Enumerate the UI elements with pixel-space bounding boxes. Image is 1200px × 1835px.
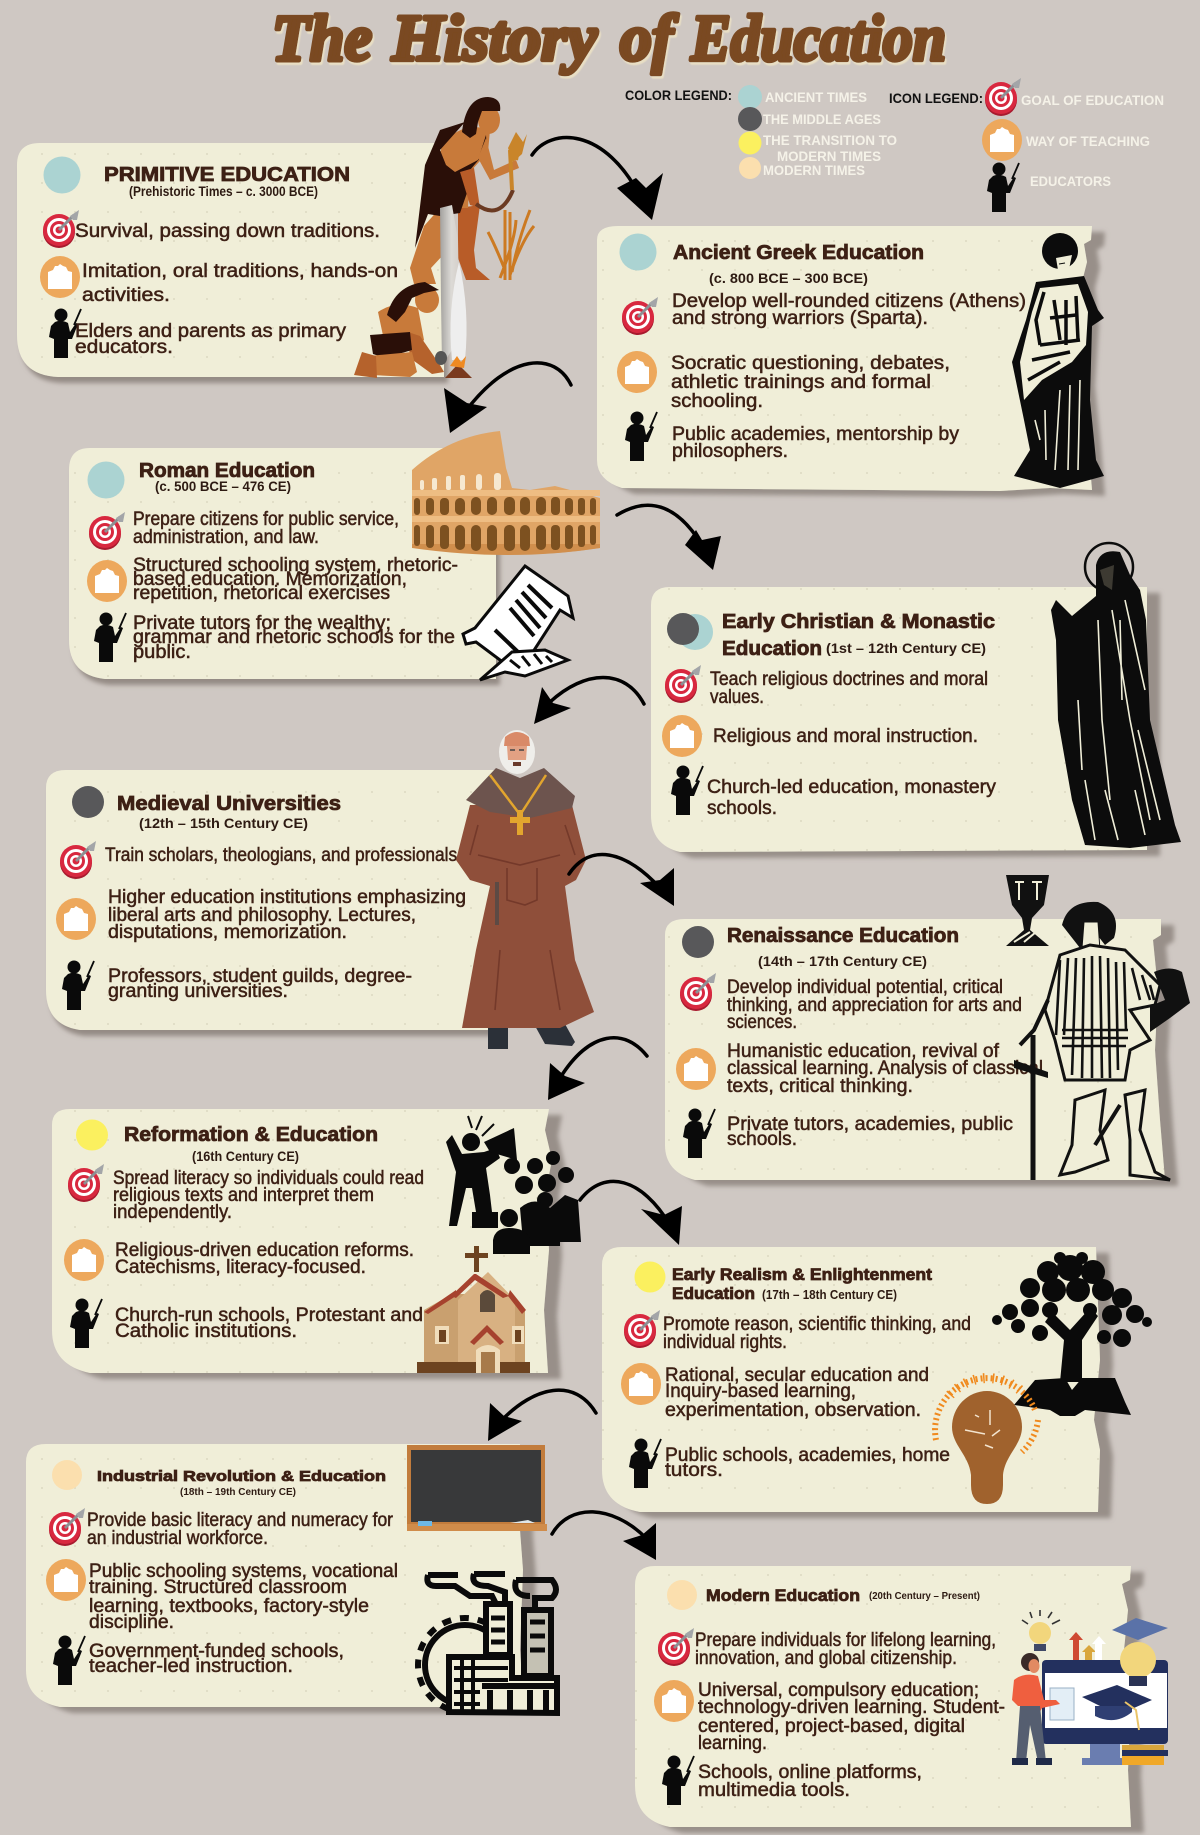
middle ages label: THE MIDDLE AGES [763,111,881,127]
illustration: factory [418,1574,557,1713]
goal text: thinking, and appreciation for arts and [727,995,1022,1016]
panel background [69,448,496,679]
illustration: church [417,1246,530,1373]
goal text [710,669,988,708]
heading: Reformation & Education [124,1124,378,1146]
goal text: Provide basic literacy and numeracy for [87,1510,394,1531]
teaching text [115,1240,414,1278]
teaching text: Universal, compulsory education; [698,1680,979,1701]
teaching text: texts, critical thinking. [727,1076,913,1097]
teaching text: based education. Memorization, [133,569,407,590]
educators text: philosophers. [672,441,788,462]
goal text: administration, and law. [133,527,319,548]
title: Education [690,2,946,75]
period: (14th – 17th Century CE) [758,954,927,969]
teaching text [671,353,950,412]
goal text [87,1510,394,1549]
period: (c. 800 BCE – 300 BCE) [709,271,868,286]
arrow: christian to medieval [534,678,644,724]
panel: renaissance education [665,875,1190,1180]
idea bulb [1022,1610,1060,1651]
icon: educator [70,1298,102,1348]
icon: educator [94,612,126,662]
panel background [602,1247,1100,1512]
orator [446,1116,517,1228]
educators label: EDUCATORS [1030,173,1111,189]
illustration: light bulb [935,1378,1038,1504]
teaching text: athletic trainings and formal [671,372,931,393]
icon: goal [49,1508,85,1546]
teaching text [133,555,458,604]
icon: educator [625,412,657,461]
heading: Early Christian & Monastic [722,611,995,633]
panel background [52,1109,552,1373]
goal text [672,291,1026,329]
era dot [667,1580,697,1610]
illustration: goblet [1006,875,1049,946]
icon legend [889,78,1164,212]
icon: teaching [617,351,657,393]
illustration: tree on open book [992,1252,1152,1416]
panel background [17,143,444,377]
icon: educator [53,1636,85,1685]
educators text: Church-run schools, Protestant and [115,1305,423,1326]
arrow: roman to christian [617,505,721,570]
illustration: cave people and fire [354,97,534,378]
period: (12th – 15th Century CE) [139,816,308,831]
campfire [435,351,472,378]
goal text: Develop individual potential, critical [727,977,1003,998]
teaching label: WAY OF TEACHING [1026,133,1150,149]
teaching text: Rational, secular education and [665,1365,929,1386]
goal text [133,509,399,548]
icon: goal [43,210,79,248]
era dot [72,786,104,818]
heading: PRIMITIVE EDUCATION [104,164,350,186]
icon: educator [671,766,703,815]
shoes [488,1024,575,1049]
teaching text: learning, textbooks, factory-style [89,1596,369,1617]
gold cross [490,775,546,835]
arrow: renaissance to reformation [548,1038,647,1100]
icon: teaching [40,256,80,298]
period: (18th – 19th Century CE) [180,1486,296,1498]
teaching text [698,1680,1005,1754]
icon: goal [89,512,125,550]
smoke column [440,205,459,365]
era dot [634,1262,666,1292]
era dot [667,613,713,650]
goal text: sciences. [727,1012,797,1033]
ancient times label: ANCIENT TIMES [765,89,867,105]
sleeves [470,825,575,1010]
title: History [391,2,598,75]
illustration: orator and crowd [446,1116,581,1254]
teaching text: classical learning. Analysis of classical [727,1058,1043,1079]
arrow: industrial to modern [552,1512,656,1560]
hood [466,768,575,818]
educators text: Church-led education, monastery [707,777,997,798]
teaching text [89,1561,398,1633]
illustration: greek woman statue [1012,233,1104,488]
heading [722,611,995,660]
goal text: religious texts and interpret them [113,1185,374,1206]
kneeling figure [354,282,444,378]
educators text: schools. [707,798,777,819]
large bulb and cap [1112,1618,1168,1686]
teaching text: Humanistic education, revival of [727,1041,1000,1062]
educators text: Schools, online platforms, [698,1762,922,1783]
monitor [1042,1660,1168,1744]
heading: Roman Education [139,460,315,482]
panel: early christian and monastic education [651,543,1181,852]
teaching text: disputations, memorization. [108,922,347,943]
arrow: reformation to realism [580,1181,682,1245]
teaching text: Socratic questioning, debates, [671,353,950,374]
books [1122,1745,1168,1765]
goal text: and strong warriors (Sparta). [672,308,928,329]
teaching text [727,1041,1043,1097]
goal text [113,1168,424,1223]
panel: medieval universities [46,770,500,1030]
icon: goal [665,665,701,703]
illustration: modern learning scene [1012,1610,1168,1765]
educators text: Private tutors, academies, public [727,1114,1013,1135]
period: (1st – 12th Century CE) [826,641,986,656]
educators text: Government-funded schools, [89,1641,344,1662]
educators text [75,321,347,358]
goal text: values. [710,687,764,708]
modern label: MODERN TIMES [763,162,865,178]
goal text: Prepare individuals for lifelong learning, [695,1630,996,1651]
crowd [493,1151,581,1254]
icon: educator [987,162,1019,212]
teaching text: Structured schooling system, rhetoric- [133,555,458,576]
heading: Renaissance Education [727,925,959,947]
educators text: granting universities. [108,981,288,1002]
teaching text: technology-driven learning. Student- [698,1697,1005,1718]
era dot [682,926,714,958]
panel background [597,226,1092,491]
teaching text: Catechisms, literacy-focused. [115,1257,366,1278]
period: (20th Century – Present) [869,1590,980,1602]
era dot [44,156,80,194]
educators text: public. [133,642,191,663]
panel: modern education [635,1566,1168,1827]
educators text: schools. [727,1129,797,1150]
ancient times swatch [738,85,762,109]
goal text: Teach religious doctrines and moral [710,669,988,690]
icon: teaching [982,119,1022,161]
icon: goal [680,973,716,1011]
icon: teaching [56,898,96,940]
transition label: THE TRANSITION TO [763,132,897,148]
panel: primitive education [17,143,444,377]
icon: educator [662,1756,694,1805]
goal text: Develop well-rounded citizens (Athens) [672,291,1026,312]
illustration: colosseum [412,431,600,555]
goal text [695,1630,996,1669]
panel background [635,1566,1131,1827]
educators text: Public schools, academies, home [665,1445,950,1466]
panel background [665,919,1165,1180]
era dot [52,1460,82,1490]
middle ages swatch [738,107,762,131]
period: (Prehistoric Times – c. 3000 BCE) [129,184,318,199]
icon: teaching [46,1559,86,1601]
transition label: MODERN TIMES [777,148,881,164]
icon: educator [49,308,81,358]
transition swatch [738,132,762,154]
illustration: monk [456,730,594,1049]
panel background [651,587,1147,852]
arrow: medieval to renaissance [569,855,674,906]
era dot [76,1120,108,1150]
educators text: grammar and rhetoric schools for the [133,627,455,648]
teaching text: discipline. [89,1612,174,1633]
dry plant [488,210,534,280]
educators text [89,1641,344,1677]
teaching text [665,1365,929,1421]
rope [495,882,499,925]
heading: Early Realism & Enlightenment [672,1265,932,1284]
goal text: innovation, and global citizenship. [695,1648,957,1669]
educators text [707,777,997,819]
period: (16th Century CE) [192,1149,299,1164]
arrow: primitive to roman [444,363,571,433]
icon: educator [683,1108,715,1158]
color legend heading: COLOR LEGEND: [625,87,732,103]
teaching text: liberal arts and philosophy. Lectures, [108,905,416,926]
educators text: multimedia tools. [698,1780,850,1801]
illustration: scroll and quill [463,566,573,680]
arrow: realism to industrial [488,1390,596,1441]
teaching text: repetition, rhetorical exercises [133,583,390,604]
teaching text: Religious and moral instruction. [713,726,978,747]
panel: roman education [69,431,600,680]
teaching text [108,887,466,943]
title: The [272,2,372,75]
era dot [88,462,124,498]
graduation cap [1082,1685,1152,1730]
illustration: saint with halo [1051,543,1181,848]
icon: goal [60,841,96,879]
goal text: Promote reason, scientific thinking, and [663,1314,971,1335]
panel: early realism and enlightenment education [602,1247,1152,1512]
educators text: tutors. [665,1460,723,1481]
heading: Education [672,1284,755,1303]
heading: Medieval Universities [117,793,341,815]
heading [672,1265,932,1303]
teaching text: schooling. [671,391,763,412]
educators text: teacher-led instruction. [89,1656,293,1677]
icon: goal [624,1310,660,1348]
educators text [108,966,412,1002]
illustration: blackboard [407,1445,547,1531]
person [1012,1653,1060,1765]
goal text: Train scholars, theologians, and professionals. [105,845,462,866]
educators text [698,1762,922,1801]
teaching text: Religious-driven education reforms. [115,1240,414,1261]
standing caveman [410,97,527,284]
teaching text: learning. [698,1733,767,1754]
goal text: Spread literacy so individuals could read [113,1168,424,1189]
panel: ancient greek education [597,226,1104,491]
panel: reformation and education [52,1109,552,1373]
goal text: individual rights. [663,1332,787,1353]
arrow: primitive to greek [532,138,663,220]
goal text: Prepare citizens for public service, [133,509,399,530]
teaching text: Public schooling systems, vocational [89,1561,398,1582]
goal text [727,977,1022,1033]
title [272,2,946,75]
panel: industrial revolution and education [26,1444,524,1707]
educators text: Elders and parents as primary [75,321,347,342]
educators text [672,424,960,462]
icon: teaching [662,715,702,757]
icon: teaching [87,560,127,602]
educators text [115,1305,423,1342]
transition label [763,132,897,164]
period: (c. 500 BCE – 476 CE) [155,479,291,494]
document [1050,1688,1074,1720]
illustration: renaissance man [1014,902,1190,1180]
period: (17th – 18th Century CE) [762,1288,897,1302]
head [499,730,535,774]
panel background [46,770,500,1030]
icon: goal target [985,78,1021,116]
icon: goal [622,297,658,335]
goal text: Survival, passing down traditions. [75,221,380,242]
modern swatch [739,157,761,179]
color legend [625,85,897,179]
educators text [665,1445,950,1481]
teaching text: experimentation, observation. [665,1400,921,1421]
icon: teaching [676,1048,716,1090]
educators text: Private tutors for the wealthy; [133,613,391,634]
teaching text: Imitation, oral traditions, hands-on [82,261,398,282]
heading: Education [722,638,822,660]
teaching text: Inquiry-based learning, [665,1381,856,1402]
educators text: Catholic institutions. [115,1321,297,1342]
heading: Ancient Greek Education [673,242,924,264]
era dot [620,234,656,270]
goal text [663,1314,971,1353]
panel background [26,1444,524,1707]
heading: Industrial Revolution & Education [97,1468,386,1485]
title: of [620,2,679,75]
teaching text [82,261,398,306]
icon: teaching [64,1239,104,1281]
goal text: independently. [113,1202,232,1223]
teaching text: centered, project-based, digital [698,1716,965,1737]
teaching text: activities. [82,285,170,306]
educators text: Professors, student guilds, degree- [108,966,412,987]
goal label: GOAL OF EDUCATION [1021,92,1164,108]
goal text: an industrial workforce. [87,1528,268,1549]
icon: teaching [654,1680,694,1722]
icon: educator [629,1438,661,1488]
icon: teaching [621,1363,661,1405]
educators text [133,613,455,663]
heading: Modern Education [706,1586,860,1605]
icon: goal [68,1164,104,1202]
icon: educator [62,960,94,1010]
icon legend heading: ICON LEGEND: [889,90,983,106]
robe [456,805,594,1028]
educators text: educators. [75,337,173,358]
growth arrows [1069,1632,1106,1660]
teaching text: training. Structured classroom [89,1577,347,1598]
icon: goal [658,1628,694,1666]
educators text: Public academies, mentorship by [672,424,960,445]
teaching text: Higher education institutions emphasizing [108,887,466,908]
educators text [727,1114,1013,1150]
